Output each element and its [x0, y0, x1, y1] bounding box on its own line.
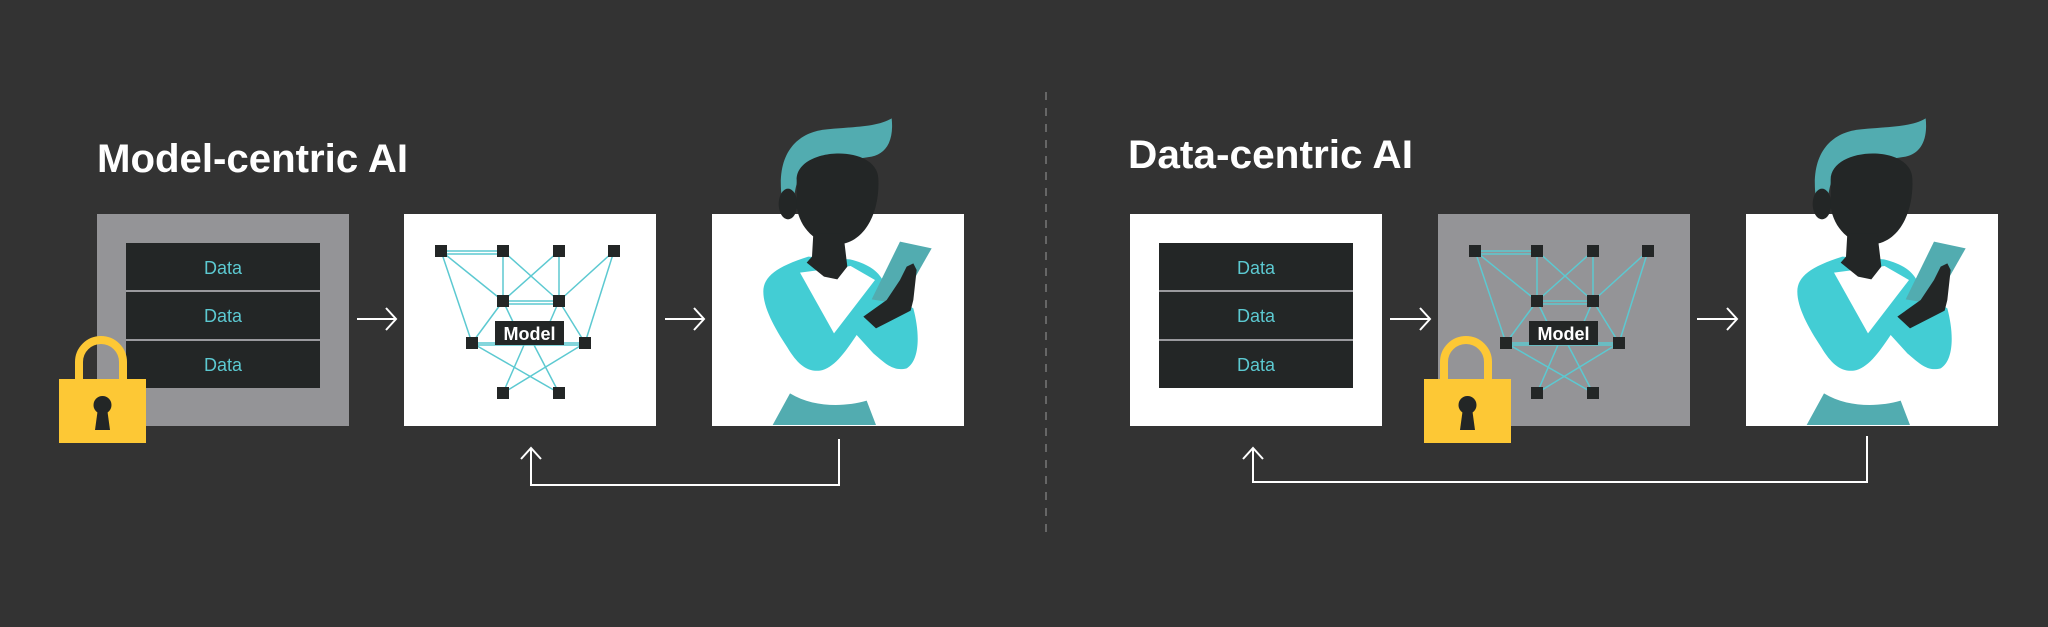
panel: model-centric AI [59, 118, 964, 485]
data box (locked, gray) [97, 214, 349, 426]
arrow: model to user [1697, 308, 1737, 330]
arrow: model to user [665, 308, 704, 330]
title: Data-centric AI: Data-centric AI [1128, 133, 1413, 177]
arrow: feedback to data [1243, 436, 1867, 482]
arrow: data to model [1390, 308, 1430, 330]
data box [1130, 214, 1382, 426]
panel: data-centric AI [1128, 118, 1998, 482]
user box with person [1746, 118, 1998, 426]
model box [404, 214, 656, 426]
user box with person [712, 118, 964, 426]
model box (locked, gray) [1438, 214, 1690, 426]
arrow: feedback to model [521, 439, 839, 485]
arrow: data to model [357, 308, 396, 330]
icon: lock [59, 340, 146, 443]
title: Model-centric AI: Model-centric AI [97, 137, 408, 181]
divider [1045, 92, 1047, 535]
icon: lock [1424, 340, 1511, 443]
